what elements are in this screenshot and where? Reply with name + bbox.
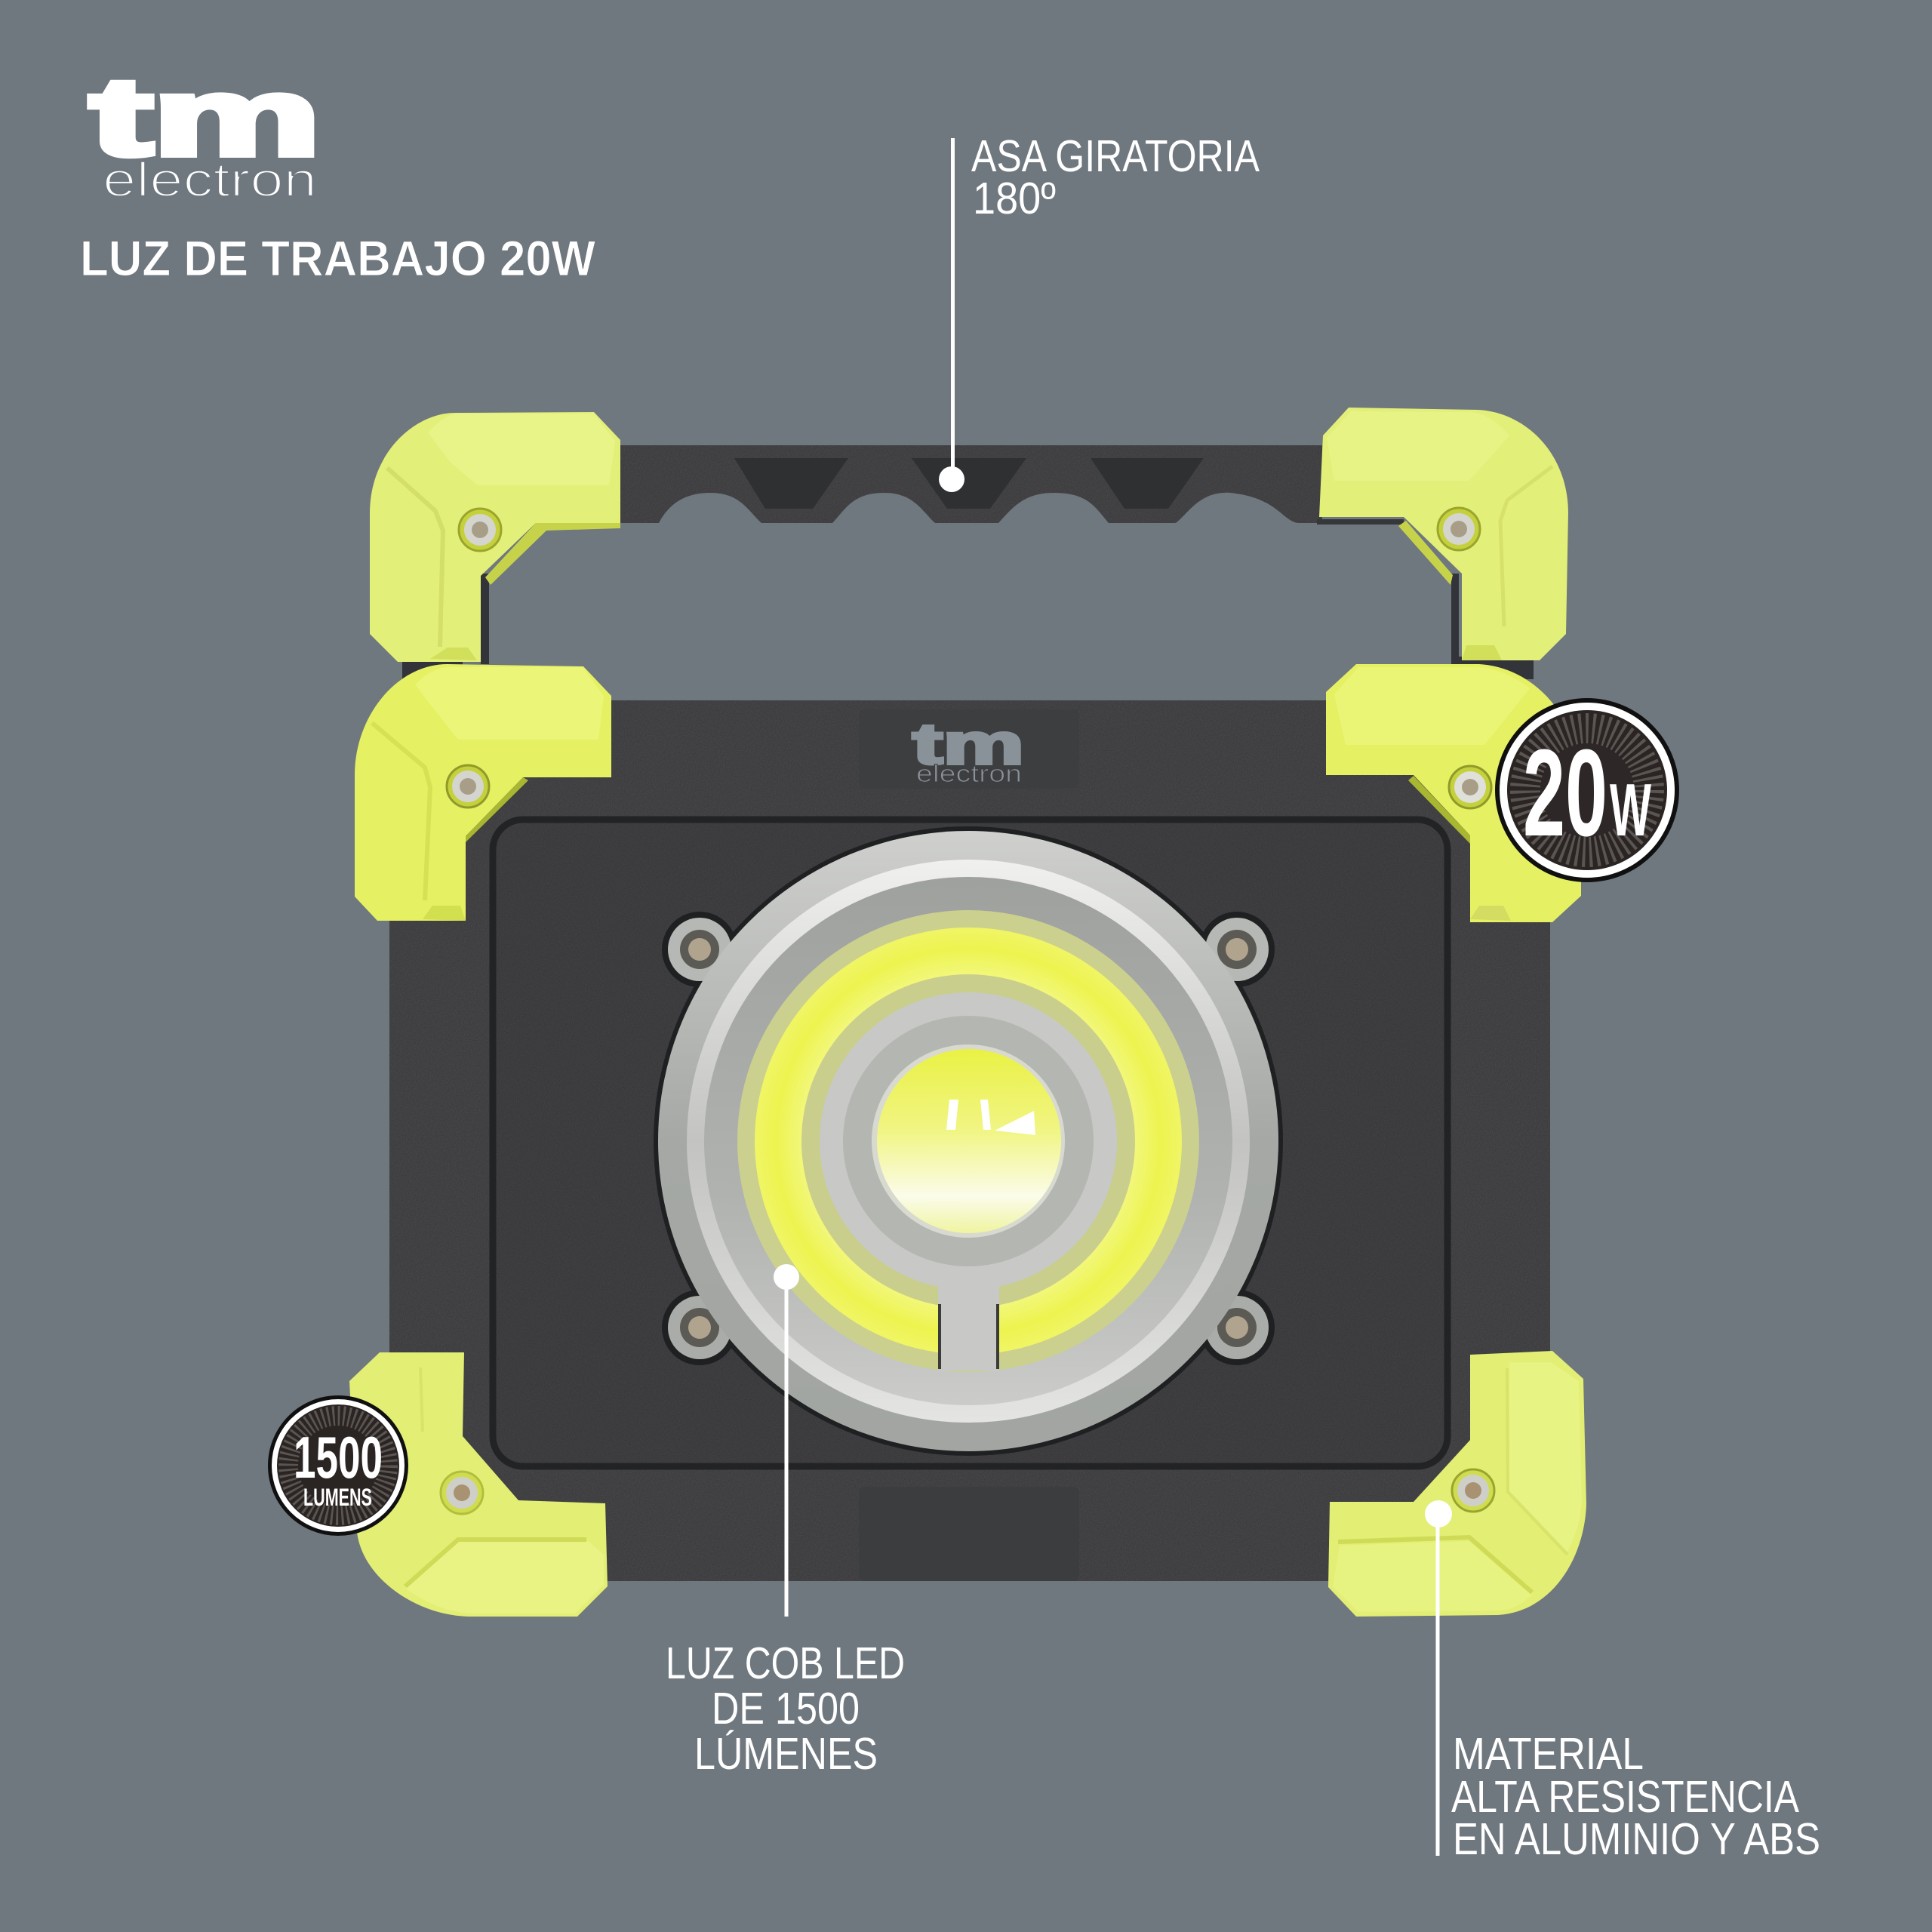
logo wordmark tm: tm [90,55,321,178]
label line 1: MATERIAL [1453,1729,1644,1779]
body corner: upper left [355,664,611,921]
grooves [1338,1537,1532,1592]
handle arm shadows [402,574,1534,679]
screw [441,1472,483,1514]
outer metal ring [658,831,1278,1451]
upper face [1327,411,1509,481]
lower face [1333,1541,1532,1612]
leader line [1435,1513,1440,1856]
end facet [1462,645,1502,660]
upper face [428,414,615,485]
under lip [485,523,620,585]
end facet [1470,906,1511,921]
leader line [785,1277,788,1617]
handle corner: upper right [1317,408,1568,660]
upper face [1334,667,1530,745]
badge rays [1525,728,1649,852]
lower edge shadow [466,777,528,842]
leader dot [939,466,964,492]
body logo tm: tm [912,712,1024,777]
bottom stem [938,1283,999,1371]
upper face [415,667,604,740]
screw [1452,1469,1494,1512]
lower face [405,1541,604,1614]
callout: COB LED [666,1264,905,1779]
right face [1509,1362,1582,1552]
groove [405,1540,586,1586]
body corner: lower right [1328,1351,1586,1617]
leader line [951,138,955,470]
body corner: upper right [1326,664,1581,922]
logo plate [859,709,1079,789]
callout: handle [939,131,1260,492]
groove [387,468,443,647]
groove [1500,466,1552,626]
label line 2: ALTA RESISTENCIA [1451,1772,1800,1822]
recess shadow [493,820,1447,1466]
handle [619,445,1322,523]
badge value: 1500 [294,1424,383,1491]
screw [459,509,501,551]
label line 3: LÚMENES [694,1729,878,1779]
handle grip slots [734,458,1204,509]
screw [1438,508,1480,550]
label line 1: LUZ COB LED [666,1638,905,1688]
logo wordmark electron: electron [103,152,317,207]
inner silver rings [820,992,1117,1290]
body corner: lower left [349,1352,608,1617]
inner edge [1408,776,1470,844]
leader dot [774,1264,799,1290]
body logo electron: electron [916,760,1022,787]
title: LUZ DE TRABAJO 20W [80,230,596,286]
mounting ears [654,826,1283,1456]
callout: material [1425,1500,1820,1864]
end facet [430,648,477,660]
lamp body [389,700,1550,1581]
COB LED ring [737,910,1199,1372]
badge: 20W [1495,698,1679,882]
groove [372,723,430,900]
label line 2: 180º [973,174,1056,223]
screw [1449,766,1491,808]
badge unit: W [1610,768,1651,851]
badge: 1500 lumens [268,1395,408,1536]
under lip [1317,519,1404,525]
leader dot [1425,1500,1452,1527]
brand logo [90,55,321,207]
end facet [423,906,466,921]
badge rays [288,1416,388,1515]
label line 3: EN ALUMINIO Y ABS [1453,1814,1820,1864]
badge value: 20 [1523,724,1607,862]
recessed panel [493,820,1447,1466]
central lens [877,1049,1061,1233]
body logo [912,712,1024,787]
label line 1: ASA GIRATORIA [971,131,1260,181]
work light product [349,408,1586,1617]
badge unit: LUMENS [303,1484,372,1511]
handle corner: upper left [370,412,620,662]
screw [447,765,489,808]
label line 2: DE 1500 [712,1684,860,1734]
COB LED lamp [654,826,1283,1456]
bottom plate [859,1487,1079,1581]
